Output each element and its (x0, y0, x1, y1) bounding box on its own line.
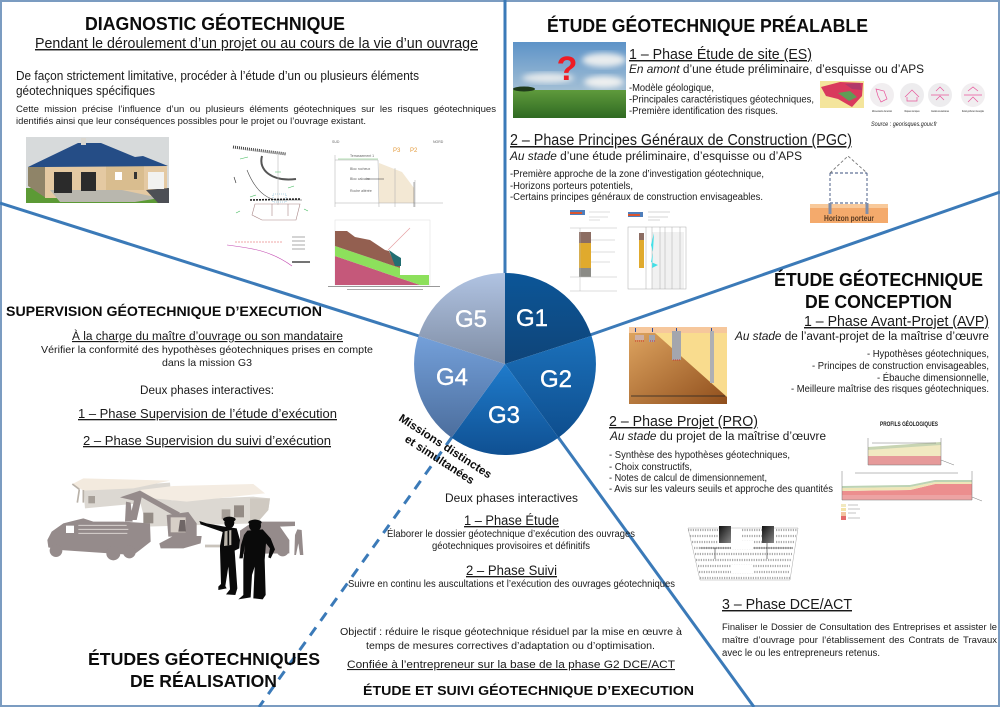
image: house (26, 137, 169, 203)
icons: risk pictograms (870, 83, 985, 113)
label G2: G2 (540, 366, 572, 393)
text block: supervision scope: dans la mission G3 (162, 357, 252, 369)
icons: risk pictograms: Retrait-gonflement des argiles (962, 109, 984, 113)
phase 1 ES timing: En amont d’une étude préliminaire, d’esquisse ou d’APS (629, 64, 924, 76)
wedge G1 (505, 273, 592, 364)
icons: risk pictograms: Risques sismiques (904, 109, 920, 113)
chart: geological profiles: PROFILS GÉOLOGIQUES (880, 420, 938, 428)
phase 2 PRO timing: Au stade du projet de la maîtrise d’œuvre (609, 431, 826, 443)
panel: G5 diagnostic (16, 13, 496, 290)
heading: realisation: DE RÉALISATION (130, 670, 277, 691)
subheading: diagnostic: Pendant le déroulement d’un projet ou au cours de la vie d’un ouvrage (35, 36, 478, 52)
label G5: G5 (455, 306, 487, 333)
phase 2 PRO bullets: - Avis sur les valeurs seuils et approche des quantités (609, 484, 833, 495)
phase 1 ES bullets: -Première identification des risques. (629, 106, 778, 117)
panel: G2 conception (609, 269, 997, 659)
phase 1 AVP bullets: - Meilleure maîtrise des risques géotechniques. (791, 384, 989, 395)
phase 2 PGC bullets (510, 169, 764, 203)
phase 2 PGC bullets: -Certains principes généraux de construction envisageables. (510, 192, 763, 203)
drawing: geotechnical cross-section: P3 (393, 148, 401, 154)
supervision phase 1: 1 – Phase Supervision de l’étude d’exécution (78, 406, 337, 421)
drawing: borehole log (570, 210, 617, 291)
text block: supervision scope (41, 330, 373, 397)
text block: objective: Objectif : réduire le risque géotechnique résiduel par la mise en œuvre à (340, 626, 682, 638)
wedge G3 (452, 364, 558, 455)
drawing: geotechnical cross-section: SUD (332, 140, 340, 144)
phase 1 ES bullets: -Principales caractéristiques géotechniques, (629, 94, 814, 106)
diagram: bearing horizon (810, 156, 888, 223)
drawing: geotechnical cross-section: Bloc rocheux (350, 167, 370, 171)
phase 2 PGC bullets: -Horizons porteurs potentiels, (510, 181, 633, 192)
diagram: bearing horizon: Horizon porteur (824, 214, 874, 223)
diagram: foundation types (629, 327, 727, 404)
phase 1 étude: 1 – Phase Étude (464, 513, 559, 528)
phase 2 PRO bullets (609, 450, 833, 495)
chart: geological profiles (841, 420, 982, 520)
phase 3 DCE text: Finaliser le Dossier de Consultation des Entreprises et assister le (722, 622, 997, 633)
wedge G5 (418, 273, 505, 364)
phase 2 PRO bullets: - Choix constructifs, (609, 462, 692, 473)
text: contractor: Confiée à l’entrepreneur sur la base de la phase G2 DCE/ACT (347, 659, 675, 671)
phase 2 suivi (348, 563, 675, 590)
text block: diagnostic scope: géotechniques spécifiques (16, 83, 155, 98)
text block: diagnostic detail: Cette mission précise l’influence d’un ou plusieurs éléments géotechniques sur les risques géotechniques (16, 104, 496, 115)
text block: supervision scope: À la charge du maître d’ouvrage ou son mandataire (72, 330, 343, 343)
phase 2 PGC bullets: -Première approche de la zone d’investigation géotechnique, (510, 169, 764, 180)
drawing: geotechnical cross-section: Terrassement 1 (350, 154, 374, 158)
phase 1 AVP bullets: - Ébauche dimensionnelle, (877, 373, 989, 384)
drawing: slope repair plan (227, 147, 310, 266)
label G4: G4 (436, 364, 468, 391)
phase 1 AVP bullets (791, 349, 989, 395)
source note: Source : georisques.gouv.fr (871, 121, 938, 128)
heading: préalable: ÉTUDE GÉOTECHNIQUE PRÉALABLE (547, 15, 868, 36)
phase 1 AVP bullets: - Principes de construction envisageables, (812, 361, 989, 372)
phase 1 ES bullets: -Modèle géologique, (629, 83, 714, 94)
phase 1 AVP heading: 1 – Phase Avant-Projet (AVP) (804, 314, 989, 330)
illustration: construction site silhouettes (47, 478, 303, 599)
phase 1 étude (387, 513, 635, 552)
phase 2 PRO heading: 2 – Phase Projet (PRO) (609, 414, 758, 430)
heading: supervision: SUPERVISION GÉOTECHNIQUE D’EXECUTION (6, 303, 322, 319)
text block: supervision scope: Vérifier la conformité des hypothèses géotechniques prises en compte (41, 344, 373, 356)
wedge G2 (505, 336, 596, 438)
text block: objective (340, 626, 682, 652)
text: two phases: Deux phases interactives (445, 491, 578, 505)
phase 2 suivi: Suivre en continu les auscultations et l’exécution des ouvrages géotechniques (348, 579, 675, 590)
phase 2 PRO bullets: - Notes de calcul de dimensionnement, (609, 473, 767, 484)
drawing: geotechnical cross-section: Bloc calcaire (350, 177, 370, 181)
phase 1 AVP bullets: - Hypothèses géotechniques, (867, 349, 989, 360)
text block: supervision scope: Deux phases interactives: (140, 385, 274, 397)
phase 1 ES bullets (629, 83, 814, 117)
heading: étude et suivi: ÉTUDE ET SUIVI GÉOTECHNIQUE D’EXECUTION (363, 683, 694, 698)
phase 3 DCE text: maître d’ouvrage pour l’établissement des Contrats de Travaux (722, 634, 997, 645)
pie chart: missions G1-G5 (414, 273, 596, 455)
panel: G4 supervision (6, 303, 373, 599)
phase 1 ES heading: 1 – Phase Étude de site (ES) (629, 46, 812, 63)
heading: conception (774, 269, 983, 312)
callout: distinct and simultaneous missions: et simultanées (402, 433, 476, 487)
label G3: G3 (488, 402, 520, 429)
text block: diagnostic detail (16, 104, 496, 127)
phase 2 suivi: 2 – Phase Suivi (466, 563, 557, 578)
drawing: geotechnical cross-section: Roche altérée (350, 189, 372, 193)
drawing: geotechnical cross-section: P2 (410, 148, 418, 154)
image: field with question mark (513, 42, 626, 118)
phase 3 DCE text (722, 622, 997, 659)
image: field with question mark: ? (557, 50, 577, 88)
text block: diagnostic scope: De façon strictement limitative, procéder à l’étude d’un ou plusieurs éléments (16, 68, 419, 83)
callout: distinct and simultaneous missions: Missions distinctes (396, 412, 493, 481)
drawing: geotechnical cross-section: NORD (433, 140, 444, 144)
text block: diagnostic detail: identifiés ainsi que leur conséquences possibles pour le projet ou l’ouvrage existant. (16, 116, 366, 127)
phase 2 PGC timing: Au stade d’une étude préliminaire, d’esquisse ou d’APS (509, 151, 802, 163)
diagram: excavation section (688, 526, 798, 580)
drawing: pressuremeter log (628, 212, 686, 289)
phase 1 étude: géotechniques provisoires et définitifs (432, 541, 590, 552)
drawing: geotechnical cross-section (332, 140, 444, 207)
label G1: G1 (516, 305, 548, 332)
heading: conception: DE CONCEPTION (805, 292, 952, 312)
phase 3 DCE text: avec le ou les entrepreneurs retenus. (722, 648, 880, 659)
panel: G3 étude et suivi d'exécution (88, 491, 694, 698)
map: geological (820, 81, 864, 108)
wedge G4 (414, 336, 505, 438)
phase 2 PRO bullets: - Synthèse des hypothèses géotechniques, (609, 450, 790, 461)
icons: risk pictograms: Cavités souterraines (931, 109, 950, 113)
phase 1 AVP timing: Au stade de l’avant-projet de la maîtrise d’œuvre (734, 331, 989, 343)
heading: realisation: ÉTUDES GÉOTECHNIQUES (88, 648, 320, 669)
phase 1 étude: Élaborer le dossier géotechnique d’exécution des ouvrages (387, 529, 635, 540)
icons: risk pictograms: Mouvements de terrain (872, 109, 892, 113)
phase 2 PGC heading: 2 – Phase Principes Généraux de Construction (PGC) (510, 132, 852, 149)
heading: conception: ÉTUDE GÉOTECHNIQUE (774, 269, 983, 290)
heading: realisation (88, 648, 320, 691)
text block: objective: temps de mesures correctives d’adaptation ou d’optimisation. (366, 640, 655, 652)
drawing: stability model (328, 220, 440, 290)
supervision phase 2: 2 – Phase Supervision du suivi d’exécution (83, 433, 331, 448)
phase 3 DCE heading: 3 – Phase DCE/ACT (722, 597, 852, 613)
text block: diagnostic scope (16, 68, 419, 98)
panel: G1 étude préalable (509, 15, 985, 291)
heading: diagnostic: DIAGNOSTIC GÉOTECHNIQUE (85, 13, 345, 34)
